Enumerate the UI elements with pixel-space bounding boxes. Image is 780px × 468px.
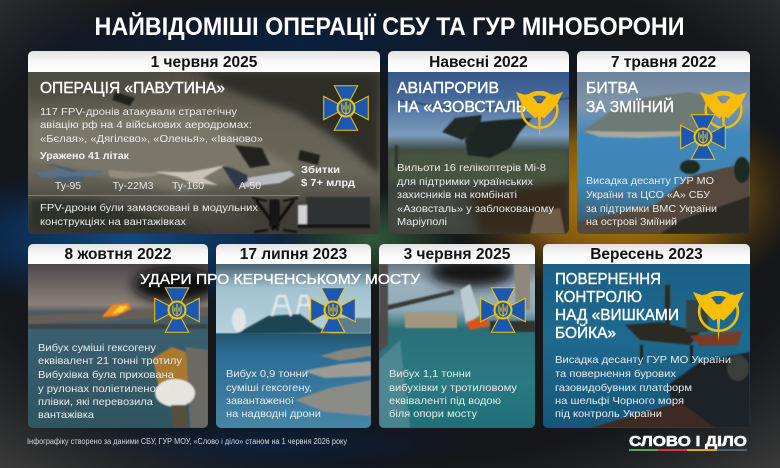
text block: concealment: конструкціях на вантажівках	[40, 216, 187, 228]
date header: 7 травня 2022	[611, 54, 716, 71]
text block: еквівалент 21 тонні тротилу	[38, 355, 183, 367]
text block: Вибух 0,9 тонни	[226, 368, 308, 380]
text block: Вибух 1,1 тонни	[389, 368, 471, 380]
text block: завантаженої	[226, 395, 294, 407]
aircraft labels: Ту-22М3	[113, 180, 154, 192]
text block: на надводні дрони	[226, 408, 321, 420]
photo: gas platforms and soldier	[543, 244, 750, 428]
text block: Маріуполі	[397, 216, 447, 228]
panel: Operation Spiderweb	[28, 51, 380, 234]
date header	[28, 244, 208, 264]
text block	[38, 342, 183, 421]
photo: Snake Island	[577, 51, 750, 234]
heading: КОНТРОЛЮ	[555, 289, 642, 306]
panel: Boyko towers	[543, 244, 750, 428]
heading: ОПЕРАЦІЯ «ПАВУТИНА»	[40, 80, 225, 97]
text block: біля опори мосту	[389, 408, 478, 420]
text block: attack summary: 117 FPV-дронів атакували стратегічну	[40, 106, 238, 118]
aircraft: Tu-160	[155, 165, 226, 185]
aircraft labels: Ту-160	[172, 180, 204, 192]
icon: SBU emblem	[324, 86, 368, 130]
text block	[226, 368, 321, 420]
date header	[216, 244, 371, 264]
text block: Висадка десанту ГУР МО	[586, 175, 714, 187]
text block: у рулонах поліетиленової	[38, 383, 171, 395]
date header: 1 червня 2025	[151, 54, 258, 71]
icon: FPV drone	[252, 198, 298, 232]
icon: SBU emblem	[155, 288, 199, 332]
heading: ЗА ЗМІЇНИЙ	[586, 98, 674, 116]
overlay heading: strikes on the Kerch bridge: УДАРИ ПРО КЕРЧЕНСЬКОМУ МОСТУ	[140, 271, 420, 288]
text block: плівки, які перевозила	[38, 396, 153, 408]
heading: БИТВА	[586, 80, 639, 97]
panel: 8 October 2022 bridge strike	[28, 244, 217, 428]
text block: Вильоти 16 гелікоптерів Мі-8	[397, 162, 546, 174]
date header: Вересень 2023	[590, 246, 703, 263]
text block: на шельфі Чорного моря	[555, 395, 684, 407]
aircraft labels	[55, 180, 261, 192]
panel: Azovstal air breakthrough	[388, 51, 570, 234]
date header: 3 червня 2025	[404, 246, 511, 263]
heading: ПОВЕРНЕННЯ	[555, 271, 661, 288]
text block: «Азовсталь» у заблокованому	[397, 203, 555, 215]
panel: Battle for Snake Island	[577, 51, 750, 234]
date header: 8 жовтня 2022	[64, 246, 172, 263]
stat: damage: $ 7+ млрд	[301, 178, 356, 189]
text block	[397, 162, 555, 228]
aircraft: A-50	[222, 166, 295, 188]
icon: truck	[298, 197, 370, 228]
date header	[577, 51, 750, 72]
text block: та повернення бурових	[555, 368, 677, 380]
heading	[397, 80, 535, 116]
text block: України та ЦСО «А» СБУ	[586, 189, 710, 201]
icon: SBU emblem	[311, 288, 355, 332]
date header: Навесні 2022	[429, 54, 528, 71]
heading: БОЙКА»	[555, 324, 616, 342]
date header	[543, 244, 750, 264]
photo: Crimean bridge arch and sea drones	[216, 244, 371, 428]
text block: attack summary: «Бєлая», «Дягілєво», «Оленья», «Іваново»	[40, 133, 263, 145]
text block: attack summary	[40, 106, 263, 145]
icon: GUR emblem	[700, 92, 747, 138]
text block	[586, 175, 717, 228]
label: aircraft hit: Уражено 41 літак	[40, 151, 130, 162]
panel: 3 June 2025 bridge strike	[379, 244, 535, 428]
heading: НАД «ВИШКАМИ	[555, 307, 679, 324]
aircraft labels: А-50	[239, 180, 261, 192]
icon: SBU emblem	[481, 288, 525, 332]
photo: underwater blast at bridge pier	[379, 244, 535, 428]
logo: Slovo i Dilo: СЛОВО І ДІЛО	[629, 433, 747, 450]
text block: суміші гексогену,	[226, 382, 312, 394]
photo: bombed airfield	[28, 51, 380, 234]
heading: НА «АЗОВСТАЛЬ»	[397, 99, 535, 116]
photo: helicopters over Azovstal	[388, 51, 570, 234]
date header: 17 липня 2023	[240, 246, 348, 263]
text block: Вибух суміші гексогену	[38, 342, 157, 354]
text block: attack summary: авіацію рф на 4 військових аеродромах:	[40, 119, 252, 131]
photo: burning bridge	[28, 244, 217, 428]
title: НАЙВІДОМІШІ ОПЕРАЦІЇ СБУ ТА ГУР МІНОБОРОНИ	[94, 11, 684, 41]
text block: на острові Зміїний	[586, 216, 677, 228]
panel: 17 July 2023 bridge strike	[216, 244, 371, 428]
icon: GUR emblem	[516, 92, 563, 138]
date header	[388, 51, 569, 72]
aircraft: Tu-95	[37, 164, 104, 183]
text block: вантажівка	[38, 409, 94, 421]
text block	[389, 368, 518, 420]
heading: АВІАПРОРИВ	[397, 80, 499, 97]
text block	[555, 354, 731, 420]
icon: GUR emblem	[693, 292, 744, 342]
heading	[586, 80, 674, 116]
heading	[555, 271, 679, 342]
footnote: Інфографіку створено за даними СБУ, ГУР МОУ, «Слово і діло» станом на 1 червня 2026 року	[27, 437, 347, 446]
text block: еквіваленті під водою	[389, 395, 501, 407]
aircraft: Tu-22M3	[108, 169, 172, 179]
text block: Вибухівка була прихована	[38, 369, 174, 381]
date header	[28, 51, 380, 72]
aircraft labels: Ту-95	[55, 180, 81, 192]
icon: SBU emblem	[681, 115, 725, 159]
text block: захисників на комбінаті	[397, 189, 517, 201]
text block: concealment	[40, 202, 259, 228]
stat: damage: Збитки	[301, 164, 340, 176]
text block: газовидобувних платформ	[555, 382, 692, 394]
date header	[379, 244, 535, 264]
stat: damage	[301, 164, 356, 189]
text block: вибухівки у тротиловому	[389, 382, 518, 394]
text block: під контроль України	[555, 408, 662, 420]
text block: concealment: FPV-дрони були замасковані в модульних	[40, 202, 259, 214]
text block: за підтримки ВМС України	[586, 203, 717, 215]
text block: Висадка десанту ГУР МО України	[555, 354, 731, 366]
text block: для підтримки українських	[397, 176, 534, 188]
